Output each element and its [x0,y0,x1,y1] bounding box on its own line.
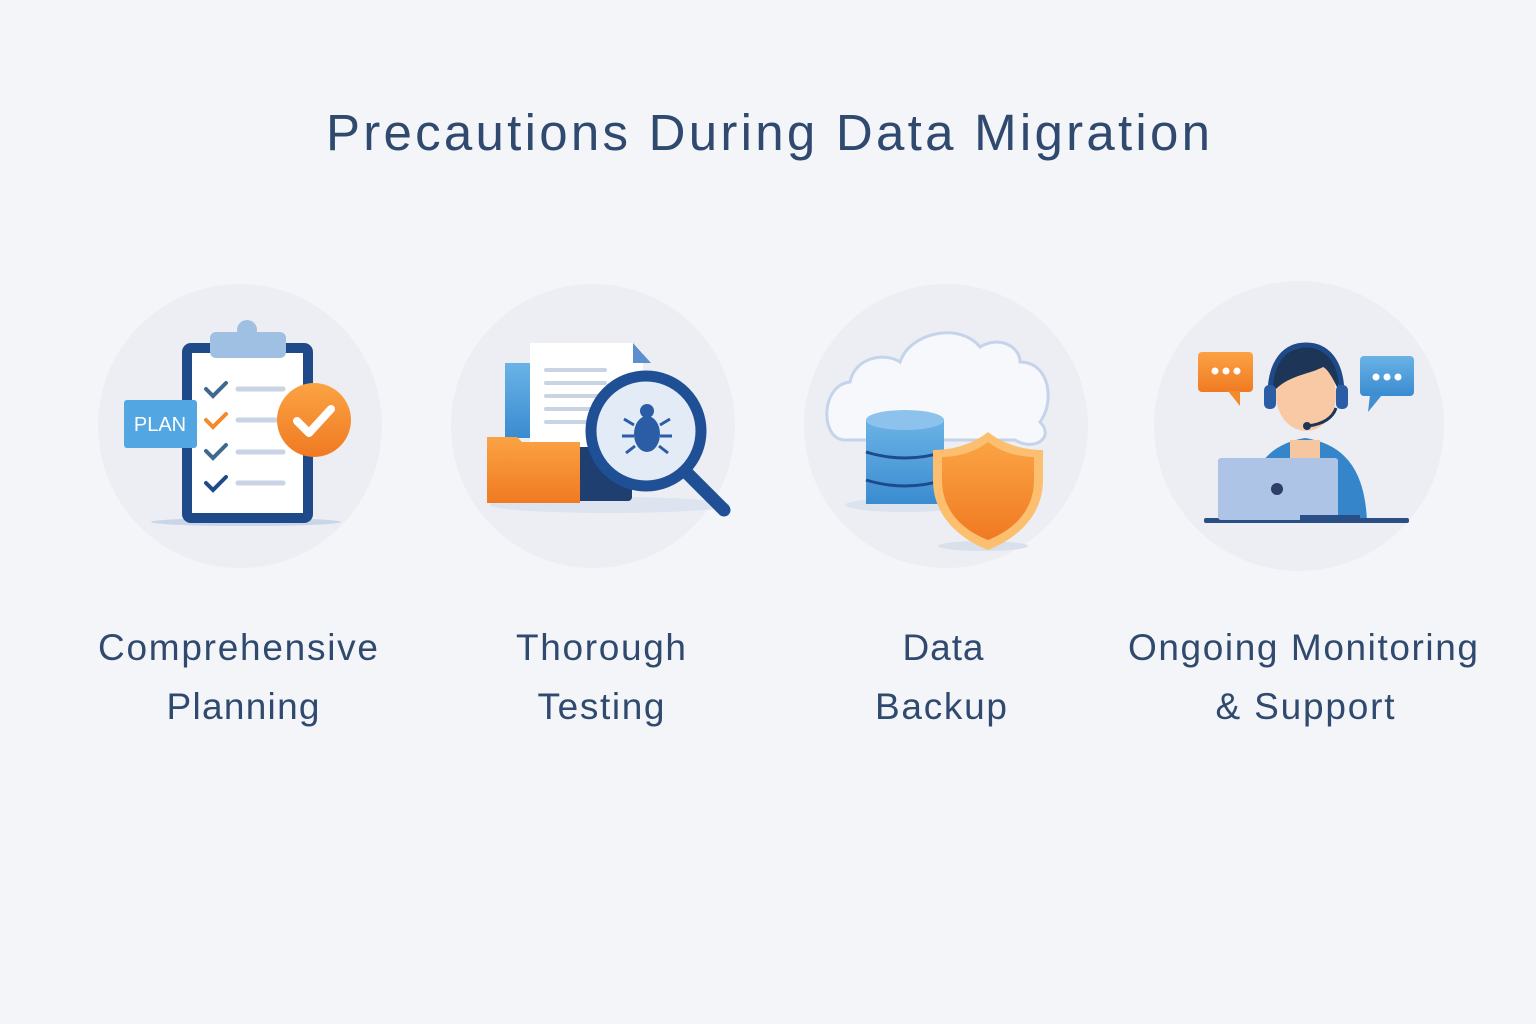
panel: comprehensive planning [98,284,382,568]
title: Precautions During Data Migration [326,104,1210,161]
label: data backup [875,627,1007,727]
panel: thorough testing [451,284,735,568]
label: ongoing monitoring: Ongoing Monitoring [1128,627,1478,668]
icon: orange check badge [277,383,351,457]
label: thorough testing [516,627,686,727]
icon: magnifier with bug [591,376,724,510]
icon: PLAN tag [124,400,197,448]
icon: folder and documents [487,343,730,513]
label: comprehensive planning: Comprehensive [98,627,378,668]
icon: orange speech bubble [1198,352,1253,406]
label: ongoing monitoring [1128,627,1478,727]
icon: database [845,410,965,512]
icon: clipboard [151,320,341,526]
icon: support agent [1245,345,1367,522]
panel: data backup [804,284,1088,568]
label: ongoing monitoring: & Support [1216,686,1395,727]
label: data backup: Data [902,627,984,668]
icon: laptop [1204,458,1409,523]
label: thorough testing: Thorough [516,627,686,668]
label: comprehensive planning: Planning [166,686,320,727]
label: comprehensive planning [98,627,378,727]
icon: PLAN tag: PLAN [134,414,186,436]
icon: cloud [827,333,1048,444]
label: thorough testing: Testing [538,686,664,727]
icon: blue speech bubble [1360,356,1414,412]
icon: shield [933,432,1043,551]
panel: ongoing monitoring [1154,281,1444,571]
label: data backup: Backup [875,686,1007,727]
